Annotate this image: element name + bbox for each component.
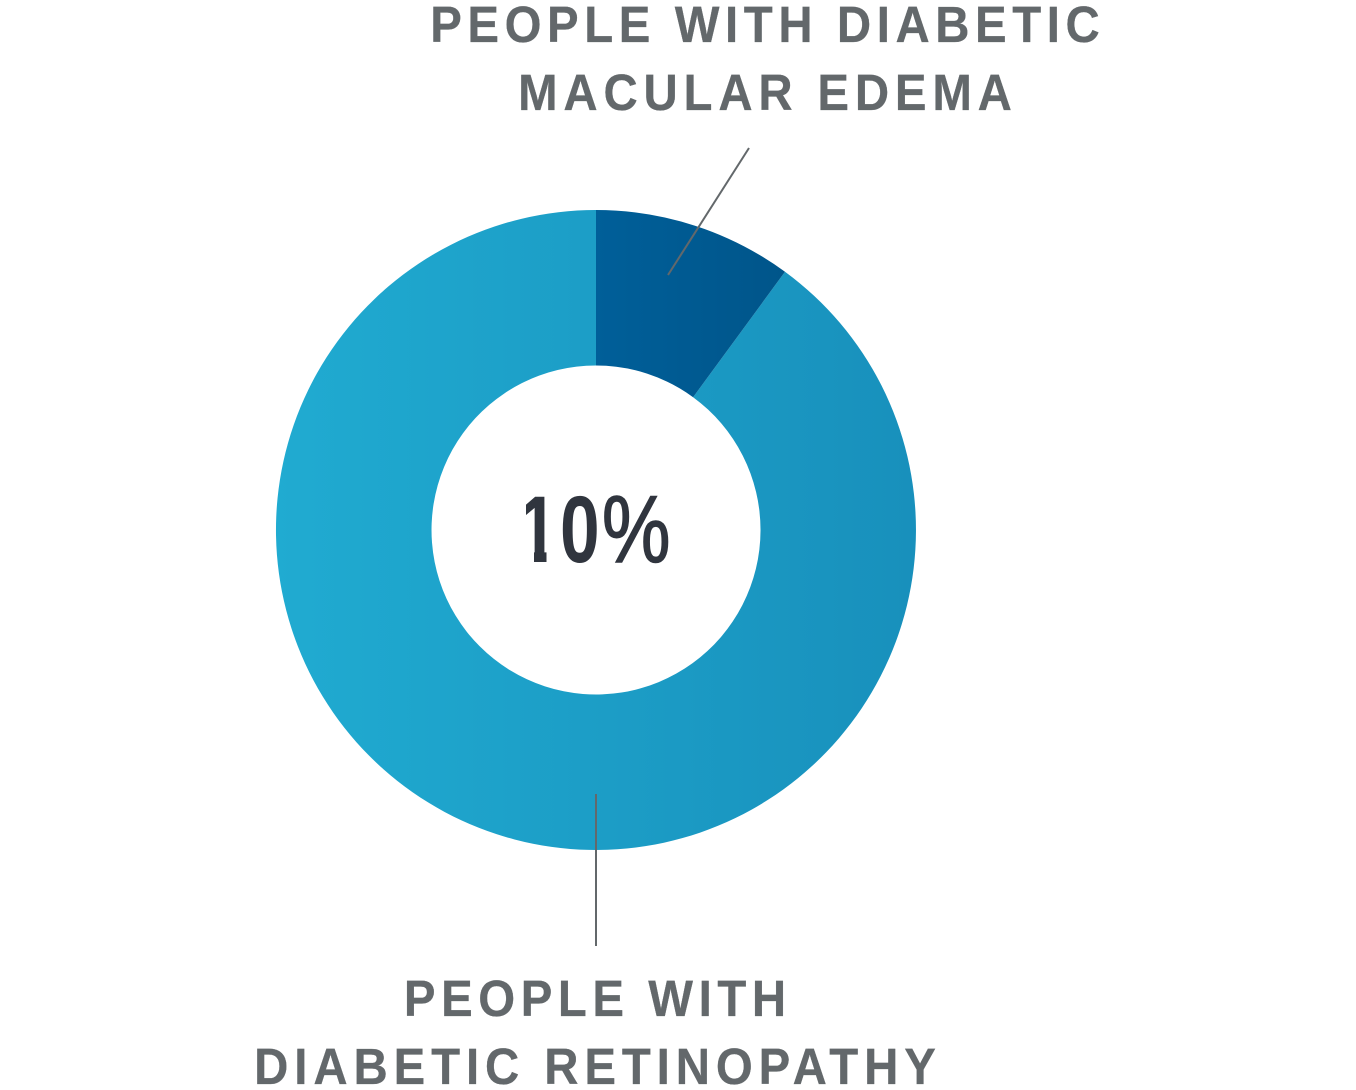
segment: diabetic macular edema <box>596 210 785 397</box>
donut chart <box>276 210 916 850</box>
heading: people with diabetic macular edema <box>430 0 1100 121</box>
leader line: retinopathy <box>595 794 597 946</box>
center value: 0 <box>560 476 600 582</box>
segment: diabetic retinopathy <box>276 210 916 850</box>
leader line: macular edema <box>668 148 749 275</box>
center value <box>526 495 668 564</box>
center value: % <box>602 477 670 583</box>
heading: people with diabetic retinopathy <box>254 970 936 1090</box>
heading: people with diabetic macular edema: MACULAR EDEMA <box>518 64 1012 121</box>
donut chart infographic <box>257 6 1098 1085</box>
heading: people with diabetic retinopathy: PEOPLE WITH <box>404 970 786 1027</box>
center value: 1 <box>518 476 558 582</box>
